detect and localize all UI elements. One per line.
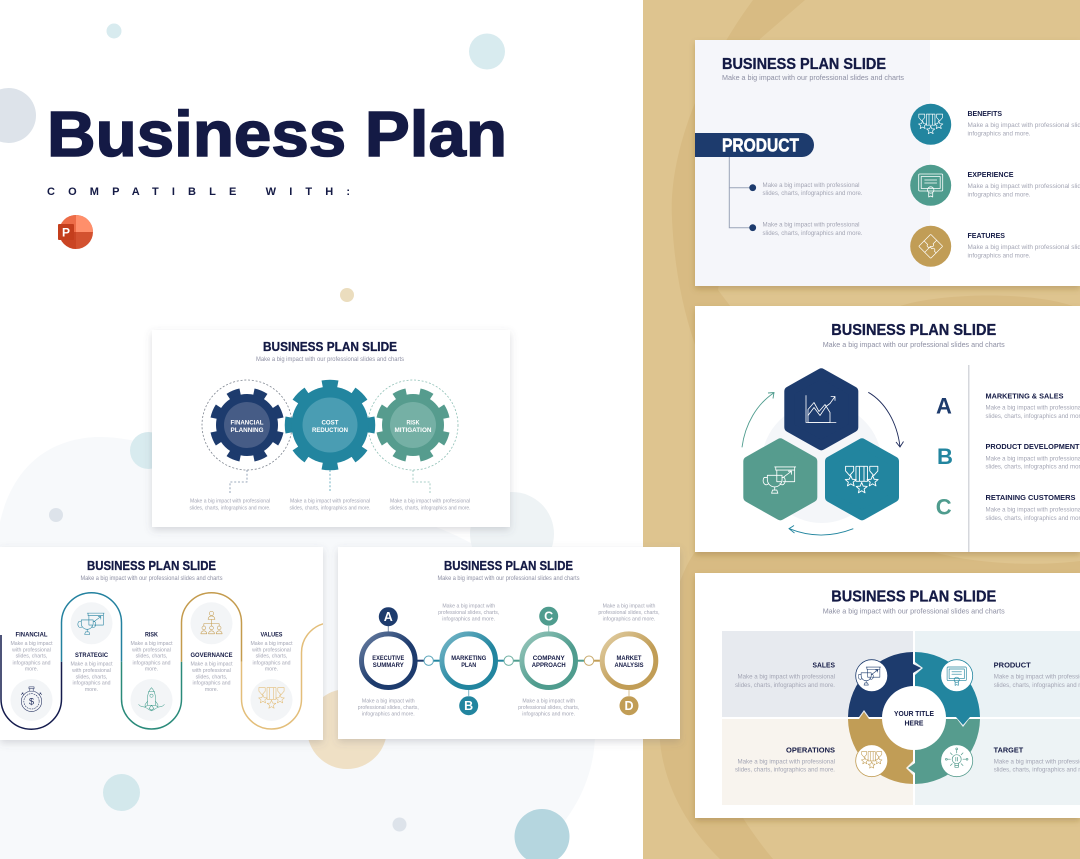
text: operations: slides, charts, infographics and more. [735,767,835,774]
text: benefits [968,111,1080,137]
subheading: ring slide: Make a big impact with our professional slides and charts [438,576,580,582]
text: financial: slides, charts, [16,654,47,660]
text block: gear descriptions: slides, charts, infographics and more. [190,505,271,511]
text blocks: ring descriptions: professional slides, charts, [358,705,419,711]
text blocks: ring descriptions: professional slides, charts, [518,705,579,711]
badge C [539,607,558,626]
badge C: C [544,610,553,624]
gear: financial planning: FINANCIAL [230,419,264,426]
text: risk: slides, charts, [136,654,167,660]
gear: cost reduction: COST [322,419,339,426]
small link circles [424,656,594,665]
badge D: D [624,699,634,713]
text: product [994,660,1080,689]
product pill [695,133,814,157]
text blocks: ring descriptions: Make a big impact with [442,604,495,610]
text: values: Make a big impact [250,641,293,647]
connectors and stems [388,626,629,696]
heading: ring slide: BUSINESS PLAN SLIDE [444,559,573,573]
letter B: B [937,444,953,469]
panel: gears slide [152,330,510,527]
arrow: teal [789,526,853,535]
title: Business Plan [47,98,507,170]
divider line [968,365,970,552]
text: values: with professional [252,647,291,653]
text block: gear descriptions [190,498,471,511]
icon: operations medals [856,745,888,777]
badge B: B [464,699,473,713]
text: strategic: slides, charts, [76,674,107,680]
ring B: marketing plan [442,634,496,688]
text: retaining customers: RETAINING CUSTOMERS [986,493,1076,502]
panel: tan right background [643,0,1080,859]
ring A: executive summary: EXECUTIVE [372,655,405,662]
arrow: navy clockwise [868,392,904,447]
text: financial [10,632,53,673]
panel: quadrant slide [695,573,1080,818]
text: sales: SALES [812,660,835,669]
hexagon: trophy [748,443,812,515]
text block: product descriptions: slides, charts, infographics and more. [762,230,863,237]
text: strategic [70,652,113,693]
ring C: company approach: APPROACH [532,662,566,669]
panel: hexagon slide [695,306,1080,552]
ring A: executive summary [362,634,415,688]
icon: features puzzle [910,226,951,267]
text block: gear descriptions: Make a big impact with professional [390,498,470,504]
text: risk: more. [145,667,158,673]
product pill: PRODUCT [722,136,799,156]
ring B: marketing plan: MARKETING [451,655,486,662]
center circle: HERE [904,718,924,728]
text: retaining customers [986,493,1080,522]
text: experience: infographics and more. [968,191,1031,198]
icon: benefits medal [910,104,951,145]
text: financial: infographics and [12,660,51,666]
subheading: wave slide: Make a big impact with our professional slides and charts [80,576,222,582]
segment: gold [848,712,913,784]
text: governance: infographics and [192,681,231,687]
gear: risk mitigation: MITIGATION [394,427,432,434]
letter A: A [936,393,952,418]
icon circles [10,602,292,721]
decorative circles on the left side [0,24,570,859]
icon: product certificate [941,660,973,692]
heading: product slide: BUSINESS PLAN SLIDE [722,56,886,73]
icon: PowerPoint logo [58,215,93,249]
ring B: marketing plan: PLAN [461,662,476,669]
text block: gear descriptions: slides, charts, infographics and more. [390,505,471,511]
text: values [250,632,293,673]
icon: org chart [201,611,222,634]
text: risk: Make a big impact [130,641,173,647]
dashed rings and connectors [202,380,458,493]
text: risk: with professional [132,647,171,653]
icon: target bulb [941,745,973,777]
icon: medals [259,688,284,708]
text block: product descriptions [762,182,863,237]
ring C: company approach: COMPANY [533,655,565,662]
text block: product descriptions: Make a big impact with professional [762,182,860,189]
icon: sales trophy [856,660,888,692]
gear: cost reduction [288,384,372,466]
text: benefits: BENEFITS [968,111,1002,118]
text: governance: slides, charts, [196,674,227,680]
tree connector [729,157,752,228]
gear: risk mitigation [369,381,457,469]
badge A [379,607,398,626]
text blocks: ring descriptions: Make a big impact with [603,604,655,610]
text: values: more. [265,667,278,673]
text: product development [986,442,1080,471]
text: experience: EXPERIENCE [968,172,1014,179]
gear: financial planning: PLANNING [230,427,264,434]
ring A: executive summary: SUMMARY [373,662,404,669]
ring D: market analysis [602,634,656,688]
text: financial: more. [25,667,38,673]
text: strategic: STRATEGIC [75,652,108,659]
text: risk: infographics and [132,660,171,666]
text: marketing and sales [986,392,1080,420]
subheading: product slide: Make a big impact with our professional slides and charts [722,73,904,82]
icon: PowerPoint logo: P [62,226,70,240]
icon: trophy [78,613,104,634]
letter C: C [936,494,952,519]
text blocks: ring descriptions [358,604,660,718]
text: sales [735,660,835,689]
icon: stopwatch [21,687,42,712]
text: governance: with professional [192,668,231,674]
subheading: gears slide: Make a big impact with our professional slides and charts [256,357,404,363]
text: financial: FINANCIAL [16,632,48,639]
text block: gear descriptions: Make a big impact with professional [190,498,270,504]
center circle [882,686,946,750]
heading: quadrant slide: BUSINESS PLAN SLIDE [831,589,996,606]
icon: rocket [139,688,164,711]
text: target [994,745,1080,774]
text: operations: Make a big impact with professional [738,758,835,765]
wave line [1,593,332,729]
text: governance: more. [205,687,218,693]
text: target: TARGET [994,745,1024,754]
text blocks: ring descriptions: Make a big impact with [522,698,575,704]
text: governance: GOVERNANCE [190,652,232,659]
gear: cost reduction: REDUCTION [312,427,348,434]
hexagon: medals [830,443,894,515]
text blocks: ring descriptions: infographics and more. [362,712,415,718]
text blocks: ring descriptions: Make a big impact with [362,698,415,704]
text: risk [130,632,173,673]
badge A: A [384,610,393,624]
segment: teal [915,652,980,725]
panel: ring process slide [338,547,680,739]
text blocks: ring descriptions: infographics and more. [442,616,495,622]
heading: wave slide: BUSINESS PLAN SLIDE [87,559,216,573]
gear: financial planning [203,381,291,469]
panel: wave timeline slide [0,547,332,740]
quadrant backgrounds [722,631,1080,805]
text: features: FEATURES [968,233,1005,240]
text: strategic: with professional [72,668,111,674]
text blocks: ring descriptions: professional slides, charts, [598,610,660,616]
center circle: YOUR TITLE [894,709,934,718]
badge D [620,696,638,715]
text: financial: with professional [12,647,51,653]
text: financial: Make a big impact [10,641,53,647]
background: pale organic blob [0,437,595,859]
subtitle: compatible with: COMPATIBLE WITH: [47,186,350,198]
heading: hexagon slide: BUSINESS PLAN SLIDE [831,322,996,339]
text: marketing and sales: MARKETING & SALES [986,392,1064,400]
ring C: company approach [522,634,576,688]
pale circle behind hexagons [762,403,882,523]
text: operations: OPERATIONS [786,745,835,754]
badge B [459,696,478,715]
text: values: infographics and [252,660,291,666]
ring D: market analysis: MARKET [616,655,642,662]
segment: green [908,719,980,784]
text block: product descriptions: slides, charts, infographics and more. [762,190,863,197]
text block: gear descriptions: slides, charts, infographics and more. [290,505,371,511]
text: sales: slides, charts, infographics and more. [735,682,835,689]
gear: risk mitigation: RISK [406,419,420,426]
hexagon: chart [789,373,853,445]
text: governance: Make a big impact [190,661,233,667]
subheading: quadrant slide: Make a big impact with our professional slides and charts [823,606,1005,615]
text: experience [968,172,1080,198]
text: benefits: infographics and more. [968,130,1031,137]
text blocks: ring descriptions: professional slides, charts, [438,610,499,616]
text: sales: Make a big impact with professional [738,674,835,681]
subheading: hexagon slide: Make a big impact with our professional slides and charts [823,340,1005,349]
arrow: green [742,392,774,447]
text blocks: ring descriptions: infographics and more. [522,712,575,718]
bullet dots [749,184,756,231]
text: features [968,233,1080,259]
text: strategic: infographics and [72,681,111,687]
text: strategic: more. [85,687,98,693]
icon: experience certificate [910,165,951,206]
panel: product slide [695,40,1080,286]
text: product development: PRODUCT DEVELOPMENT [986,442,1080,451]
text block: product descriptions: Make a big impact with professional [762,222,860,229]
text: product: PRODUCT [994,660,1031,669]
text blocks: ring descriptions: infographics and more. [603,616,655,622]
text: values: slides, charts, [256,654,287,660]
text: operations [735,745,835,774]
text: features: infographics and more. [968,252,1031,259]
text: values: VALUES [260,632,282,639]
text: risk: RISK [145,632,158,639]
text: governance [190,652,233,693]
text block: gear descriptions: Make a big impact with professional [290,498,370,504]
ring D: market analysis: ANALYSIS [614,662,644,669]
text: strategic: Make a big impact [70,661,113,667]
heading: gears slide: BUSINESS PLAN SLIDE [263,340,397,354]
segment: navy [848,652,921,717]
icon: stopwatch: $ [29,696,34,706]
